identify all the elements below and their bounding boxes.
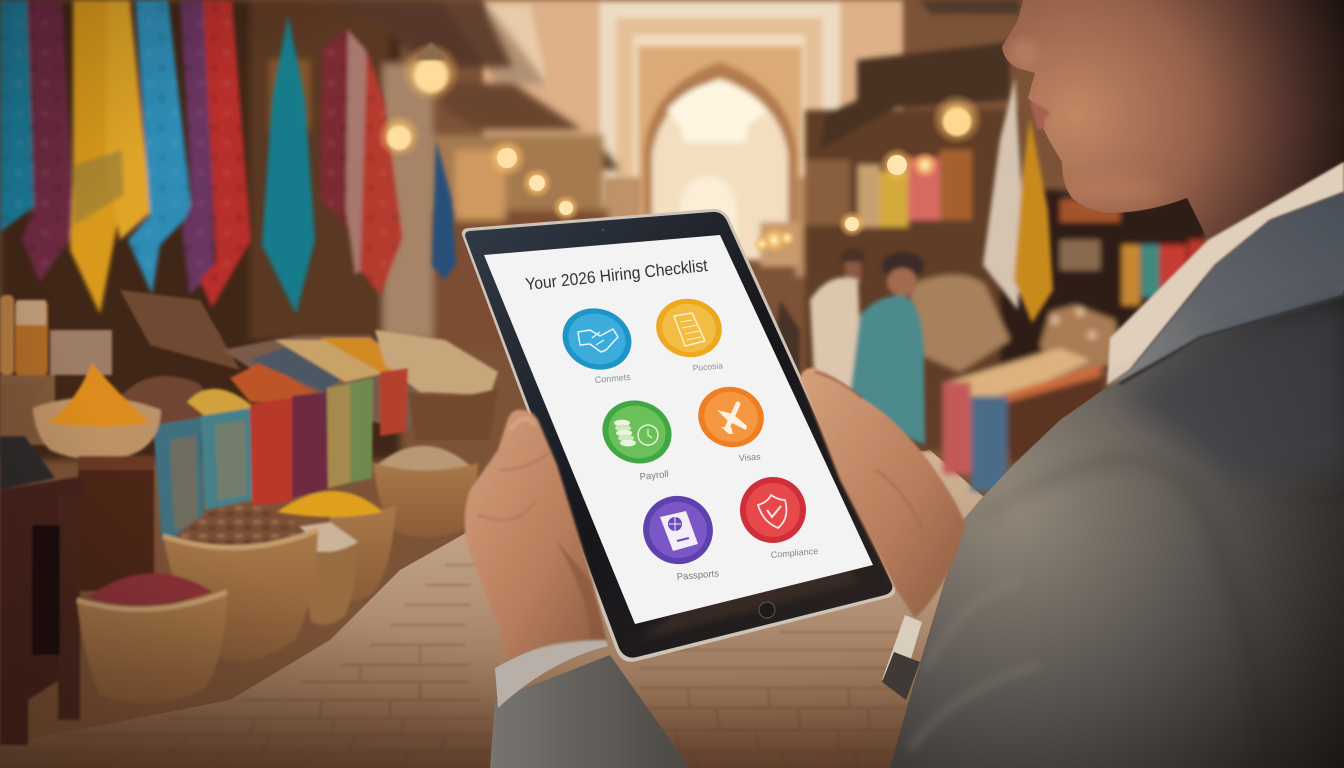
- background shoppers: [770, 248, 925, 445]
- icon: payroll coins and clock: [594, 391, 680, 473]
- right hand: [800, 368, 965, 618]
- label: contracts: Conmets: [594, 372, 632, 385]
- left market goods: spices, fabric stacks, baskets: [0, 290, 498, 745]
- person: face and neck: [1002, 0, 1344, 240]
- icon: contracts handshake: [554, 299, 640, 379]
- floor: cobblestones: [0, 450, 1010, 768]
- label: payroll: Payroll: [639, 469, 669, 483]
- person: left sleeve and cuff: [490, 632, 690, 768]
- basket: orange spice bowl: [33, 363, 161, 459]
- left hand: [465, 410, 607, 660]
- tablet title: Your 2026 Hiring Checklist: [524, 256, 709, 294]
- wooden stool: [0, 476, 83, 745]
- tablet body: [462, 209, 896, 662]
- label: documents: Pucosia: [692, 360, 724, 373]
- label: passports: Passports: [676, 568, 720, 583]
- icon: compliance shield: [731, 468, 815, 552]
- person: right cuff: [882, 615, 922, 700]
- basket: yellow spice: [277, 491, 396, 602]
- basket: red beans: [77, 573, 227, 704]
- shopper: teal shirt: [850, 252, 925, 445]
- right stall: roof, shelves and goods: [805, 0, 1205, 491]
- basket: brown nuts: [163, 505, 318, 661]
- label: compliance: Compliance: [770, 546, 819, 560]
- tablet: [462, 209, 896, 662]
- central archway: [483, 0, 903, 277]
- label: visas: Visas: [738, 451, 761, 463]
- right hanging fabrics: [983, 78, 1053, 323]
- person: shirt collar: [1107, 162, 1344, 385]
- lamps: [377, 42, 983, 254]
- icon: visas airplane: [691, 379, 771, 455]
- icon: documents: [651, 293, 727, 363]
- home button: [759, 602, 775, 618]
- camera: [602, 229, 604, 231]
- shopper: white shirt: [810, 248, 865, 395]
- basket: nuts far right: [373, 446, 478, 538]
- icon: passports: [633, 486, 723, 574]
- left stall: backdrop, roofs and pillar: [0, 0, 620, 460]
- basket: middle: [290, 522, 358, 625]
- person: jacket: [890, 192, 1344, 768]
- tablet screen: [484, 235, 873, 624]
- hanging fabrics: [0, 0, 456, 314]
